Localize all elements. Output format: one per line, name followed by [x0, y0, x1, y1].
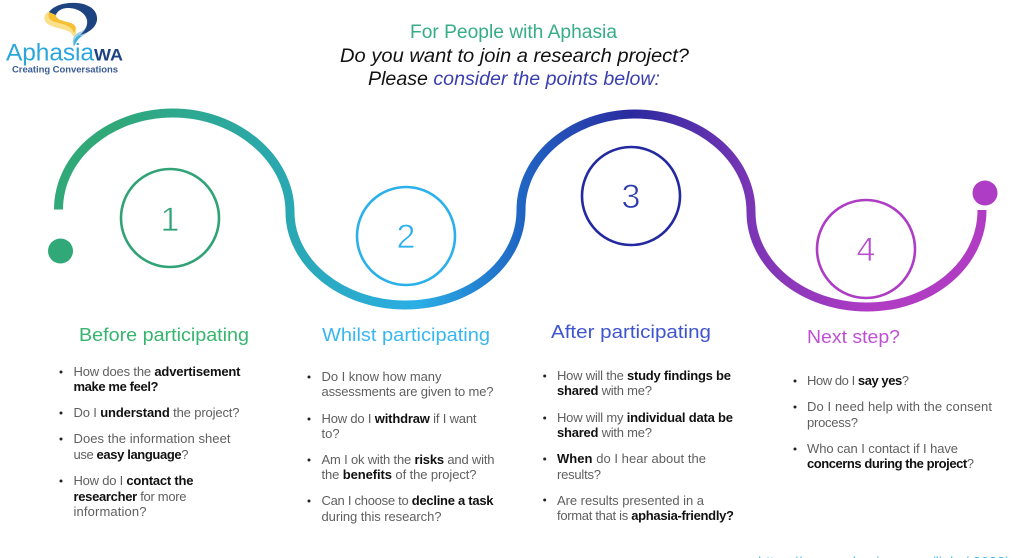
question list: How will the study findings be	[557, 368, 731, 383]
panel: after participating	[543, 321, 734, 523]
title line 3: Please consider the points below:	[368, 69, 660, 90]
step 2 badge	[357, 187, 455, 285]
question list	[543, 368, 734, 523]
logo: AphasiaWA: WA	[94, 46, 123, 64]
heading: Whilst participating	[322, 324, 490, 345]
question list: concerns during the project?	[807, 456, 974, 471]
step 2 badge: 2	[397, 218, 415, 256]
heading: Next step?	[807, 326, 900, 347]
question list: assessments are given to me?	[322, 384, 494, 399]
question list: How do I say yes?	[807, 373, 909, 388]
question list: information?	[74, 504, 146, 519]
question list	[60, 364, 241, 519]
question list: use easy language?	[74, 447, 188, 462]
step 3 badge: 3	[622, 178, 640, 216]
question list	[794, 373, 992, 471]
step 3 badge	[582, 147, 680, 245]
heading: Before participating	[79, 324, 249, 345]
question list: process?	[807, 415, 858, 430]
step 1 badge: 1	[161, 201, 179, 239]
heading: After participating	[551, 321, 711, 342]
question list: Who can I contact if I have	[807, 441, 958, 456]
title line 1: For People with Aphasia	[410, 22, 617, 43]
panel: next step	[794, 326, 992, 471]
question list: Do I need help with the consent	[807, 399, 992, 414]
logo: AphasiaWA	[6, 3, 123, 76]
wave curve	[58, 113, 982, 307]
question list: When do I hear about the	[557, 451, 706, 466]
wave timeline	[48, 113, 998, 307]
question list	[308, 369, 494, 524]
end dot	[972, 180, 998, 206]
question list: make me feel?	[74, 379, 159, 394]
title line 2: Do you want to join a research project?	[340, 46, 689, 67]
icon: speech swirl	[44, 3, 97, 47]
question list: How does the advertisement	[74, 364, 241, 379]
question list: Am I ok with the risks and with	[322, 452, 494, 467]
question list: How will my individual data be	[557, 410, 733, 425]
question list: researcher for more	[74, 489, 186, 504]
title	[340, 22, 689, 90]
question list: Do I understand the project?	[74, 405, 240, 420]
question list: the benefits of the project?	[322, 467, 476, 482]
question list: How do I withdraw if I want	[322, 411, 477, 426]
logo tagline: Creating Conversations	[12, 64, 118, 76]
panel: before participating	[60, 324, 249, 519]
question list: shared with me?	[557, 425, 652, 440]
question list: results?	[557, 467, 601, 482]
step 4 badge	[817, 200, 915, 298]
start dot	[48, 238, 73, 264]
panel: whilst participating	[308, 324, 494, 524]
question list: to?	[322, 426, 340, 441]
step 4 badge: 4	[857, 231, 875, 269]
question list: Do I know how many	[322, 369, 442, 384]
step 1 badge	[121, 169, 219, 267]
question list: Does the information sheet	[74, 431, 231, 446]
question list: Can I choose to decline a task	[322, 493, 494, 508]
question list: shared with me?	[557, 383, 652, 398]
question list: Are results presented in a	[557, 493, 705, 508]
question list: How do I contact the	[74, 473, 194, 488]
question list: during this research?	[322, 509, 442, 524]
logo wordmark: Aphasia	[6, 40, 94, 66]
question list: format that is aphasia-friendly?	[557, 508, 734, 523]
